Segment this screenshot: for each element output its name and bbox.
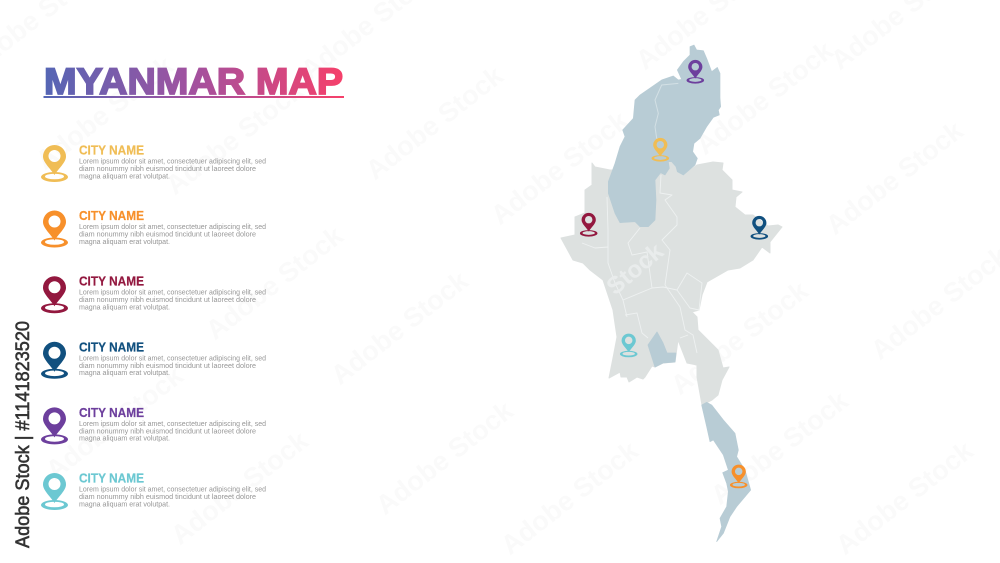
legend item: purple city: CITY NAME: [79, 406, 144, 420]
watermark pattern: Adobe Stock: [160, 75, 309, 201]
watermark pattern: Adobe Stock: [40, 360, 189, 486]
watermark pattern: Adobe Stock: [325, 265, 474, 391]
map: southern highlighted region: [702, 402, 751, 542]
legend item: crimson city: [41, 275, 266, 313]
legend item: orange city: [41, 209, 266, 248]
legend item: orange city: Lorem ipsum dolor sit amet, consectetuer adipiscing elit, sed: [79, 224, 266, 231]
legend item: cyan city: Lorem ipsum dolor sit amet, consectetuer adipiscing elit, sed: [79, 486, 266, 494]
map: Yangon highlighted region: [648, 332, 676, 367]
map watermark: Stock: [601, 237, 669, 301]
watermark pattern: Adobe Stock: [165, 425, 314, 551]
map pin: purple: [687, 60, 704, 84]
watermark pattern: Adobe Stock: [200, 220, 349, 346]
watermark pattern: Adobe Stock: [705, 385, 854, 511]
legend item: cyan city: [41, 472, 266, 510]
watermark pattern: Adobe Stock: [370, 395, 519, 521]
map: grey regions: [561, 162, 782, 405]
watermark pattern: Adobe Stock: [485, 105, 634, 231]
map of Myanmar: [561, 45, 782, 542]
map pin: yellow: [652, 138, 669, 162]
legend item: blue city: [41, 340, 266, 379]
legend item: crimson city: Lorem ipsum dolor sit amet, consectetuer adipiscing elit, sed: [79, 290, 266, 297]
legend item: cyan city: CITY NAME: [79, 472, 144, 486]
legend item: yellow city: [41, 144, 266, 182]
legend item: yellow city: Lorem ipsum dolor sit amet, consectetuer adipiscing elit, sed: [79, 158, 266, 166]
legend item: yellow city: diam nonummy nibh euismod tincidunt ut laoreet dolore: [79, 166, 256, 173]
legend item: yellow city: magna aliquam erat volutpat.: [79, 173, 170, 180]
watermark pattern: Adobe Stock: [665, 275, 814, 401]
watermark pattern: Adobe Stock: [820, 115, 969, 241]
watermark pattern: Adobe Stock: [830, 435, 979, 561]
legend item: purple city: [41, 406, 266, 444]
legend item: crimson city: magna aliquam erat volutpat.: [79, 304, 170, 312]
legend item: orange city: magna aliquam erat volutpat.: [79, 239, 170, 246]
legend item: cyan city: diam nonummy nibh euismod tincidunt ut laoreet dolore: [79, 494, 256, 501]
watermark pattern: Adobe Stock: [360, 60, 509, 186]
map: northern highlighted region: [608, 45, 721, 227]
legend item: purple city: magna aliquam erat volutpat.: [79, 436, 170, 443]
legend list: [41, 144, 266, 510]
map pin: crimson: [580, 213, 597, 237]
map pin: cyan: [620, 334, 637, 357]
legend item: crimson city: diam nonummy nibh euismod tincidunt ut laoreet dolore: [79, 297, 256, 304]
legend item: crimson city: CITY NAME: [79, 275, 144, 289]
legend item: blue city: Lorem ipsum dolor sit amet, consectetuer adipiscing elit, sed: [79, 355, 266, 362]
map: region borders: [582, 83, 702, 353]
title: MYANMAR MAP: [44, 61, 343, 102]
watermark pattern: Adobe Stock: [495, 435, 644, 561]
legend item: blue city: diam nonummy nibh euismod tincidunt ut laoreet dolore: [79, 363, 256, 370]
watermark pattern: Adobe Stock: [30, 50, 179, 176]
map pin: orange: [730, 465, 747, 488]
legend item: orange city: diam nonummy nibh euismod tincidunt ut laoreet dolore: [79, 232, 256, 238]
map pin: blue: [751, 216, 768, 240]
stock credit: Adobe Stock | #1141823520: [12, 321, 34, 548]
legend item: cyan city: magna aliquam erat volutpat.: [79, 501, 170, 508]
legend item: orange city: CITY NAME: [79, 209, 144, 223]
legend item: purple city: Lorem ipsum dolor sit amet, consectetuer adipiscing elit, sed: [79, 421, 266, 428]
legend item: blue city: CITY NAME: [79, 340, 144, 354]
watermark pattern: Adobe Stock: [690, 35, 839, 161]
legend item: purple city: diam nonummy nibh euismod tincidunt ut laoreet dolore: [79, 428, 256, 435]
legend item: blue city: magna aliquam erat volutpat.: [79, 370, 170, 377]
legend item: yellow city: CITY NAME: [79, 144, 144, 158]
